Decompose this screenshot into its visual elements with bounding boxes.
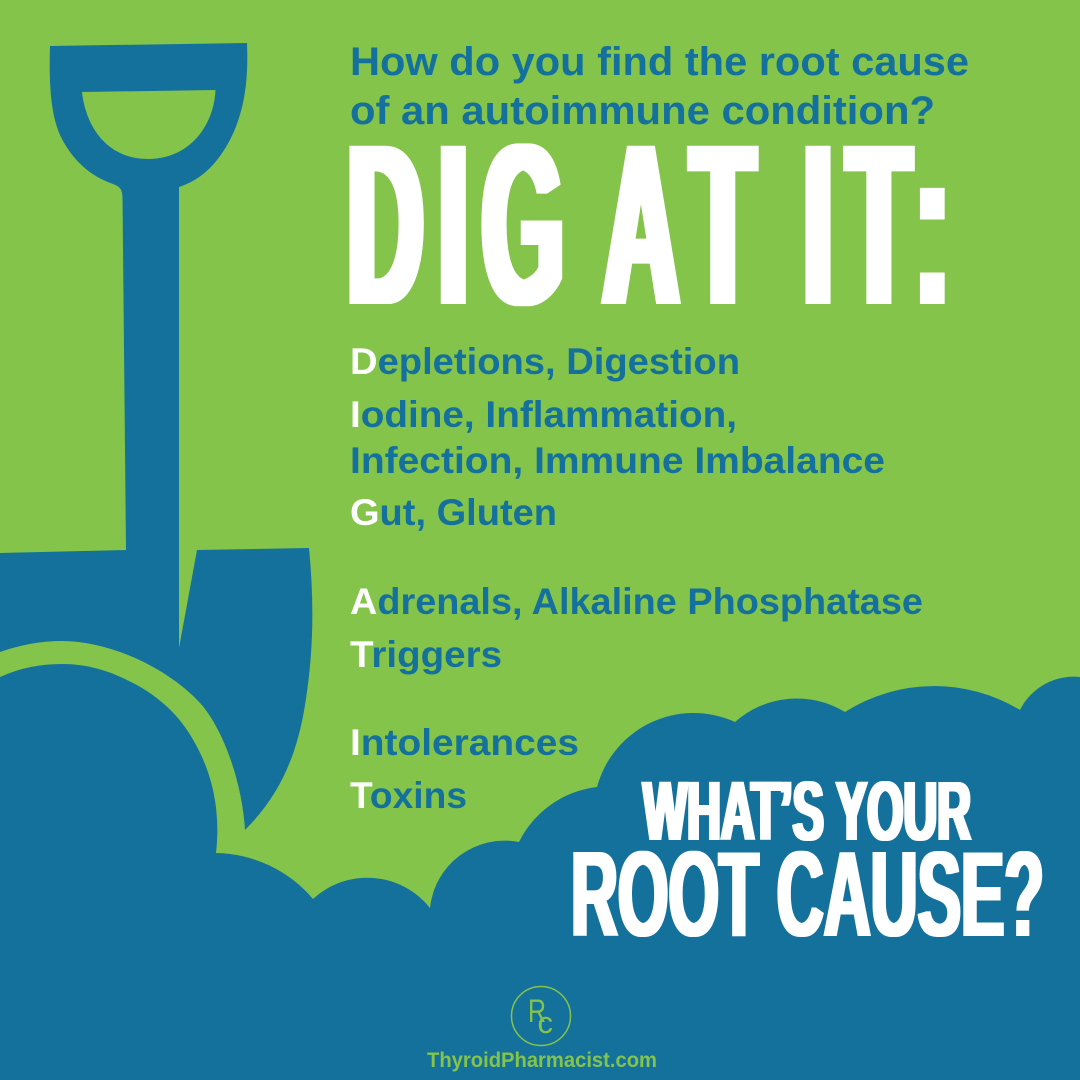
question heading: of an autoimmune condition?: [350, 89, 935, 133]
ring: green arc around the mound: [0, 641, 250, 880]
logo: RC circle: R: [528, 993, 546, 1029]
acronym list: IT: Intolerances: [350, 722, 579, 763]
acronym list: IT: [350, 722, 579, 816]
acronym list: DIG: [350, 341, 885, 533]
acronym list: DIG: Depletions, Digestion: [350, 341, 740, 382]
acronym list: DIG: Infection, Immune Imbalance: [350, 440, 885, 481]
acronym list: DIG: Gut, Gluten: [350, 492, 557, 533]
acronym list: DIG: Iodine, Inflammation,: [350, 394, 737, 435]
question heading: How do you find the root cause: [350, 40, 969, 84]
question heading: [350, 40, 969, 133]
acronym list: AT: Triggers: [350, 634, 502, 675]
acronym list: IT: Toxins: [350, 775, 467, 816]
acronym list: AT: [350, 581, 923, 675]
acronym list: AT: Adrenals, Alkaline Phosphatase: [350, 581, 923, 622]
callout: what's your root cause: [571, 764, 1044, 962]
headline: DIG AT IT: DIG AT IT:: [347, 96, 950, 353]
icon: shovel: [0, 43, 312, 900]
logo: RC circle: [512, 986, 570, 1046]
website url: ThyroidPharmacist.com: [427, 1049, 657, 1072]
ground mounds: [0, 664, 1080, 1080]
logo: RC circle: c: [538, 1005, 553, 1040]
